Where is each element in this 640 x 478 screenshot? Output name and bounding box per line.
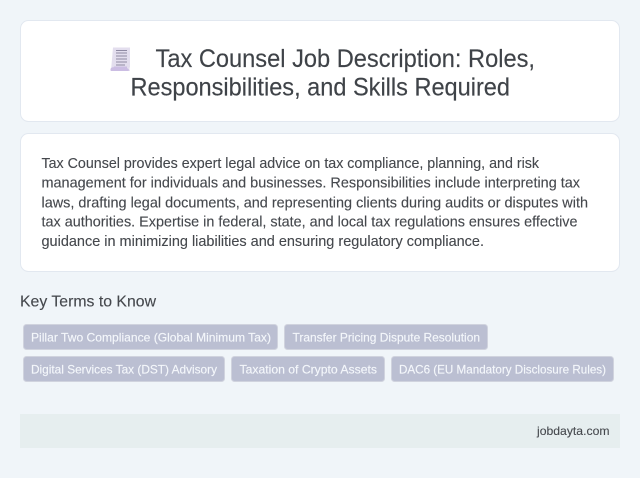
description text <box>42 156 588 250</box>
tag: Transfer Pricing: Transfer Pricing Dispute Resolution <box>292 330 480 344</box>
description text: laws, drafting legal documents, and representing clients during audits or disputes with <box>42 195 588 211</box>
footer bar: jobdayta.com <box>536 424 610 438</box>
tag: Pillar Two: Pillar Two Compliance (Global Minimum Tax) <box>31 330 271 344</box>
panel: title card <box>20 20 620 122</box>
tag: Pillar Two <box>24 324 278 350</box>
icon: tax receipt scroll <box>110 48 130 71</box>
tag: Crypto: Taxation of Crypto Assets <box>240 362 377 376</box>
tag: Transfer Pricing <box>284 324 488 350</box>
description text: guidance in minimizing liabilities and ensuring regulatory compliance. <box>42 234 484 250</box>
footer bar <box>20 414 620 448</box>
tag: DAC6 <box>392 356 614 382</box>
title text: Tax Counsel Job Description: Roles, <box>156 45 535 73</box>
title text <box>130 45 535 102</box>
panel: description card <box>20 134 620 272</box>
tag: Digital Services <box>24 356 224 382</box>
description text: management for individuals and businesses. Responsibilities include interpreting tax <box>42 175 581 191</box>
description text: tax authorities. Expertise in federal, state, and local tax regulations ensures effective <box>42 215 578 231</box>
tag: Digital Services: Digital Services Tax (DST) Advisory <box>31 362 217 376</box>
tag: Crypto <box>232 356 384 382</box>
description text: Tax Counsel provides expert legal advice on tax compliance, planning, and risk <box>42 156 540 172</box>
title text: Responsibilities, and Skills Required <box>130 74 510 102</box>
heading: key terms: Key Terms to Know <box>20 294 156 311</box>
tag: DAC6: DAC6 (EU Mandatory Disclosure Rules) <box>399 362 606 376</box>
